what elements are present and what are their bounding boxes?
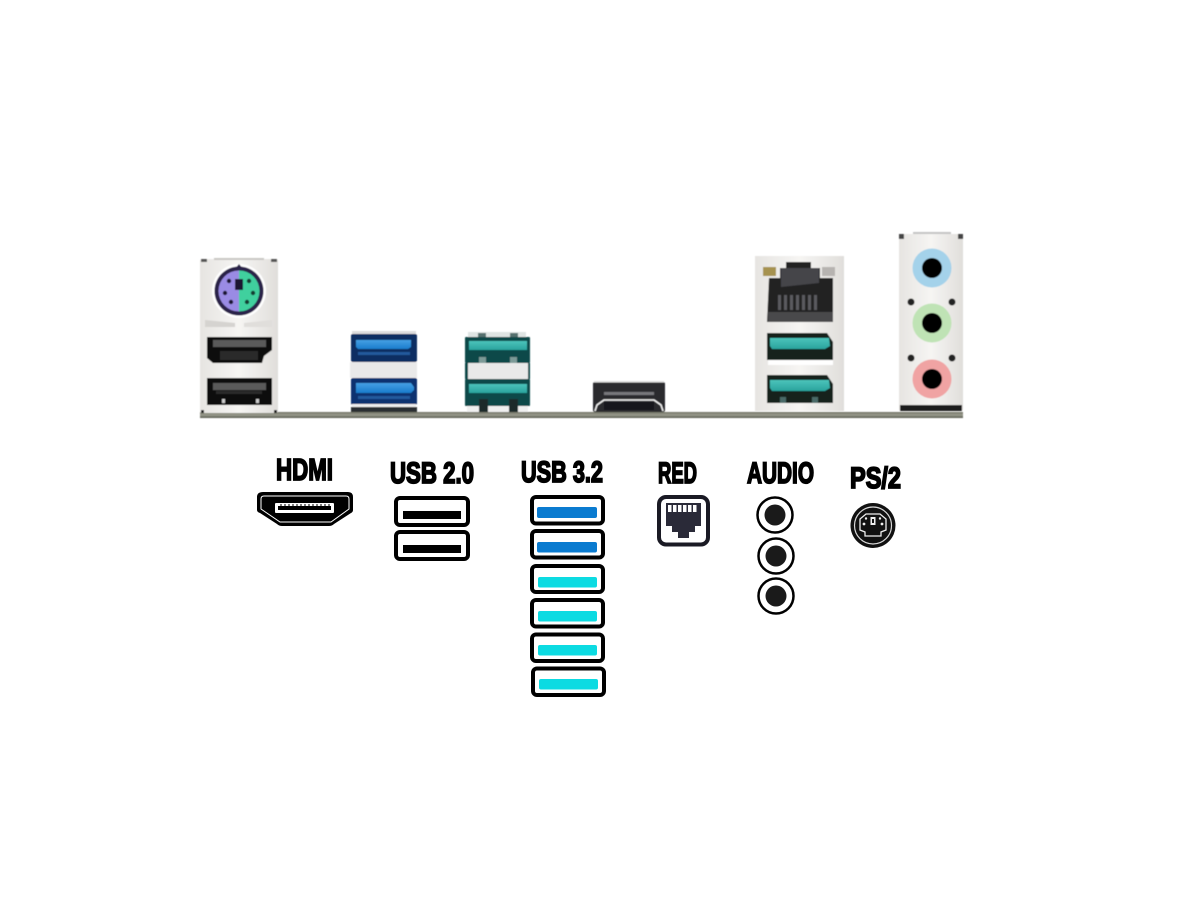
icon: USB 2.0 port 1 bbox=[396, 498, 468, 525]
heading: USB 3.2: USB 3.2 bbox=[521, 456, 603, 489]
icon: audio jack 2 bbox=[758, 538, 794, 574]
icon: USB 3.2 port 1 bbox=[532, 497, 603, 524]
icon: USB 3.2 port 6 bbox=[533, 668, 604, 695]
USB 3.2 teal lower bbox=[767, 375, 833, 403]
blue line-in jack bbox=[912, 248, 952, 288]
port stack: PS/2 and USB 2.0 bbox=[200, 258, 278, 413]
icon: audio jack 1 bbox=[758, 498, 792, 532]
icon: USB 3.2 port 5 bbox=[532, 634, 603, 661]
icon group: USB 2.0 bbox=[396, 498, 468, 559]
USB 2.0 black port lower bbox=[207, 378, 272, 405]
green line-out jack bbox=[912, 304, 952, 342]
icon: RJ45 network bbox=[659, 497, 708, 544]
icon: USB 3.2 port 4 bbox=[532, 600, 603, 626]
RJ45 LAN jack bbox=[763, 262, 835, 322]
icon: PS/2 bbox=[850, 503, 896, 548]
rear I/O panel bbox=[200, 232, 963, 418]
heading: RED: RED bbox=[658, 457, 697, 490]
heading: PS/2: PS/2 bbox=[850, 462, 901, 495]
port stack: blue USB 3.2 bbox=[350, 331, 417, 412]
heading: AUDIO: AUDIO bbox=[747, 457, 814, 490]
USB 3.2 teal upper bbox=[767, 333, 833, 360]
heading: HDMI: HDMI bbox=[276, 452, 333, 487]
icon: HDMI bbox=[257, 492, 353, 526]
icon group: audio jacks bbox=[758, 498, 794, 614]
icon: audio jack 3 bbox=[758, 578, 794, 614]
port stack: RJ45 and USB 3.2 bbox=[755, 256, 844, 411]
icon group: USB 3.2 bbox=[532, 497, 604, 695]
port stack: teal USB 3.2 bbox=[465, 332, 530, 412]
PS/2 connector bbox=[212, 264, 266, 318]
USB 2.0 black port upper bbox=[207, 337, 272, 363]
audio jack stack bbox=[899, 232, 963, 411]
pink mic jack bbox=[912, 360, 952, 398]
icon: USB 2.0 port 2 bbox=[396, 532, 468, 559]
heading: USB 2.0: USB 2.0 bbox=[390, 457, 474, 490]
HDMI port bbox=[593, 381, 665, 412]
base plate bbox=[200, 412, 963, 418]
icon: USB 3.2 port 3 bbox=[532, 566, 603, 592]
icon: USB 3.2 port 2 bbox=[532, 531, 603, 558]
